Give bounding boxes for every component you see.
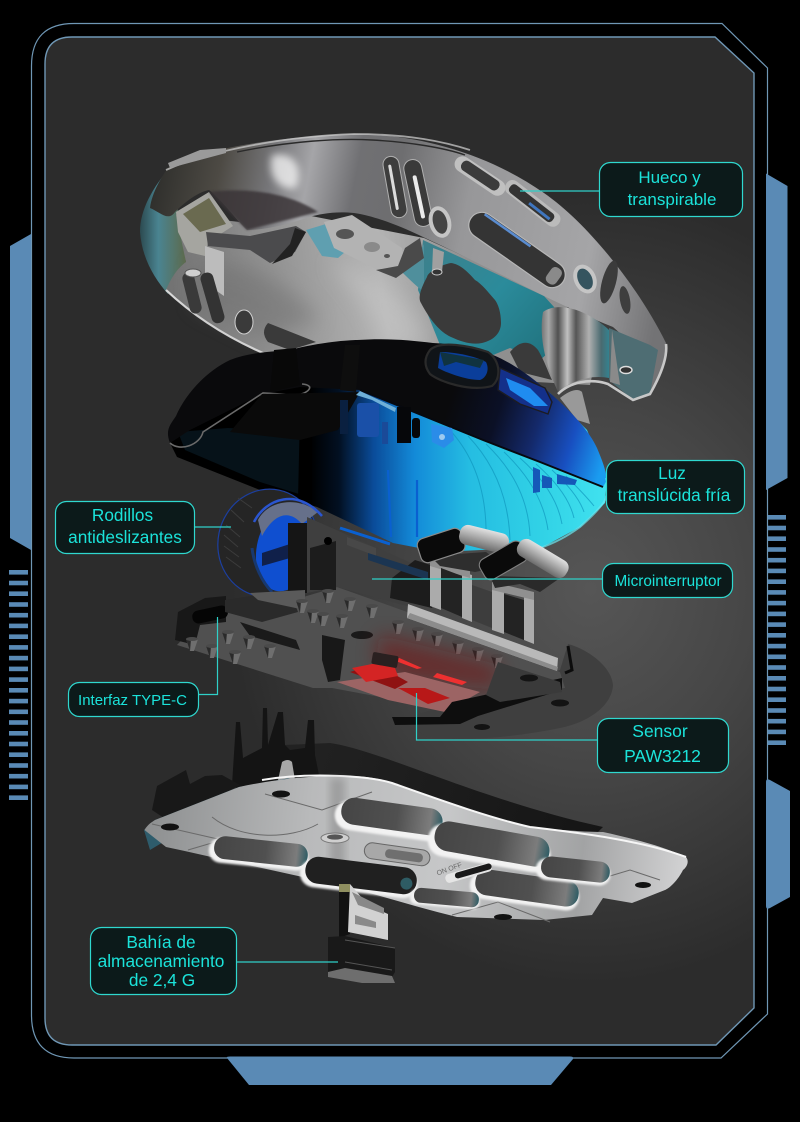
leader line — [237, 961, 338, 963]
frame: side and bottom tabs — [10, 174, 790, 1085]
inner mount plate — [324, 215, 405, 274]
callout: Luz translúcida fría — [606, 460, 744, 514]
power switch label: ON OFF — [436, 862, 463, 877]
plate pads — [152, 792, 660, 922]
callout: Bahía de almacenamiento de 2,4 G — [90, 928, 338, 994]
callout: Sensor PAW3212: PAW3212 — [624, 746, 701, 766]
teal inner area — [418, 240, 575, 360]
frame: left tick ruler — [9, 570, 28, 800]
blue window — [498, 368, 552, 414]
callout: Rodillos antideslizantes — [56, 502, 231, 554]
plate body — [144, 776, 688, 920]
centre screw — [321, 833, 349, 843]
shell left arm — [176, 192, 233, 256]
leader line — [372, 578, 603, 580]
callout: Interfaz TYPE-C — [68, 617, 218, 716]
screw holes — [161, 790, 651, 920]
shell inner floor — [166, 215, 600, 385]
callout: Sensor PAW3212: Sensor — [632, 721, 688, 741]
callout: Hueco y transpirable — [520, 162, 742, 216]
dark mechanical bar and right plate — [392, 678, 562, 725]
dark panel lines — [170, 384, 310, 447]
button arms and rollers — [430, 552, 505, 572]
leader line — [416, 693, 598, 740]
shell standoff — [432, 248, 444, 274]
mouse part: bottom plate — [144, 708, 688, 983]
blue shell lower body — [170, 370, 607, 552]
callout: Rodillos antideslizantes: antideslizantes — [68, 527, 182, 547]
callout: Hueco y transpirable: transpirable — [628, 190, 716, 209]
callout: Microinterruptor: Microinterruptor — [614, 573, 722, 590]
internal posts — [340, 391, 577, 493]
power switch — [444, 862, 493, 884]
rear ribs — [542, 307, 609, 392]
soft floor shading — [195, 264, 320, 338]
sensor recess — [363, 842, 431, 867]
callout: Luz translúcida fría: Luz — [658, 463, 686, 483]
callout: Rodillos antideslizantes: Rodillos — [92, 505, 153, 525]
storage bay — [339, 884, 350, 938]
PCB board — [177, 587, 565, 714]
shell ventilation slots — [382, 153, 632, 315]
callout: Luz translúcida fría: translúcida fría — [618, 485, 731, 505]
cones — [186, 589, 503, 668]
clips and spikes — [232, 708, 320, 790]
blue shell upper surface — [168, 339, 607, 487]
callout: Interfaz TYPE-C: Interfaz TYPE-C — [78, 692, 187, 709]
shell lip — [558, 344, 666, 400]
red sensor glow — [375, 635, 500, 690]
black inner cavity — [178, 428, 312, 498]
back wall — [284, 743, 603, 840]
leader line — [520, 190, 600, 192]
mouse part: translucent blue shell — [168, 339, 608, 552]
leader line — [198, 617, 218, 694]
callout: Bahía de almacenamiento de 2,4 G: de 2,4 G — [129, 970, 195, 990]
storage dongle — [328, 936, 395, 982]
button comb bracket — [407, 604, 558, 671]
mouse part: top metal shell — [140, 134, 667, 424]
shell side face — [140, 165, 186, 294]
mouse part: base disc under PCB — [400, 644, 613, 739]
dark upper bracket — [307, 517, 427, 607]
black USB socket — [175, 596, 226, 645]
shell upper skin — [150, 134, 667, 394]
frame: right tick ruler — [768, 515, 786, 745]
callout: Bahía de almacenamiento de 2,4 G: almacenamiento — [98, 951, 224, 971]
callout: Sensor PAW3212 — [416, 693, 728, 772]
leader line — [194, 526, 231, 528]
mouse part: scroll wheel — [208, 480, 328, 606]
ribs on blue shell — [448, 428, 594, 540]
vent pills — [208, 795, 612, 912]
red chips — [350, 652, 467, 704]
mouse part: main PCB with buttons — [175, 517, 572, 730]
frame: inner panel — [45, 37, 754, 1045]
shell floor slots — [181, 271, 316, 350]
shell holes — [420, 263, 501, 344]
grey wedge under lip — [560, 390, 590, 424]
callout: Hueco y transpirable: Hueco y — [638, 168, 701, 187]
callout: Bahía de almacenamiento de 2,4 G: Bahía de — [126, 932, 196, 952]
vent window pill — [426, 345, 498, 388]
callout: Microinterruptor — [372, 564, 732, 598]
